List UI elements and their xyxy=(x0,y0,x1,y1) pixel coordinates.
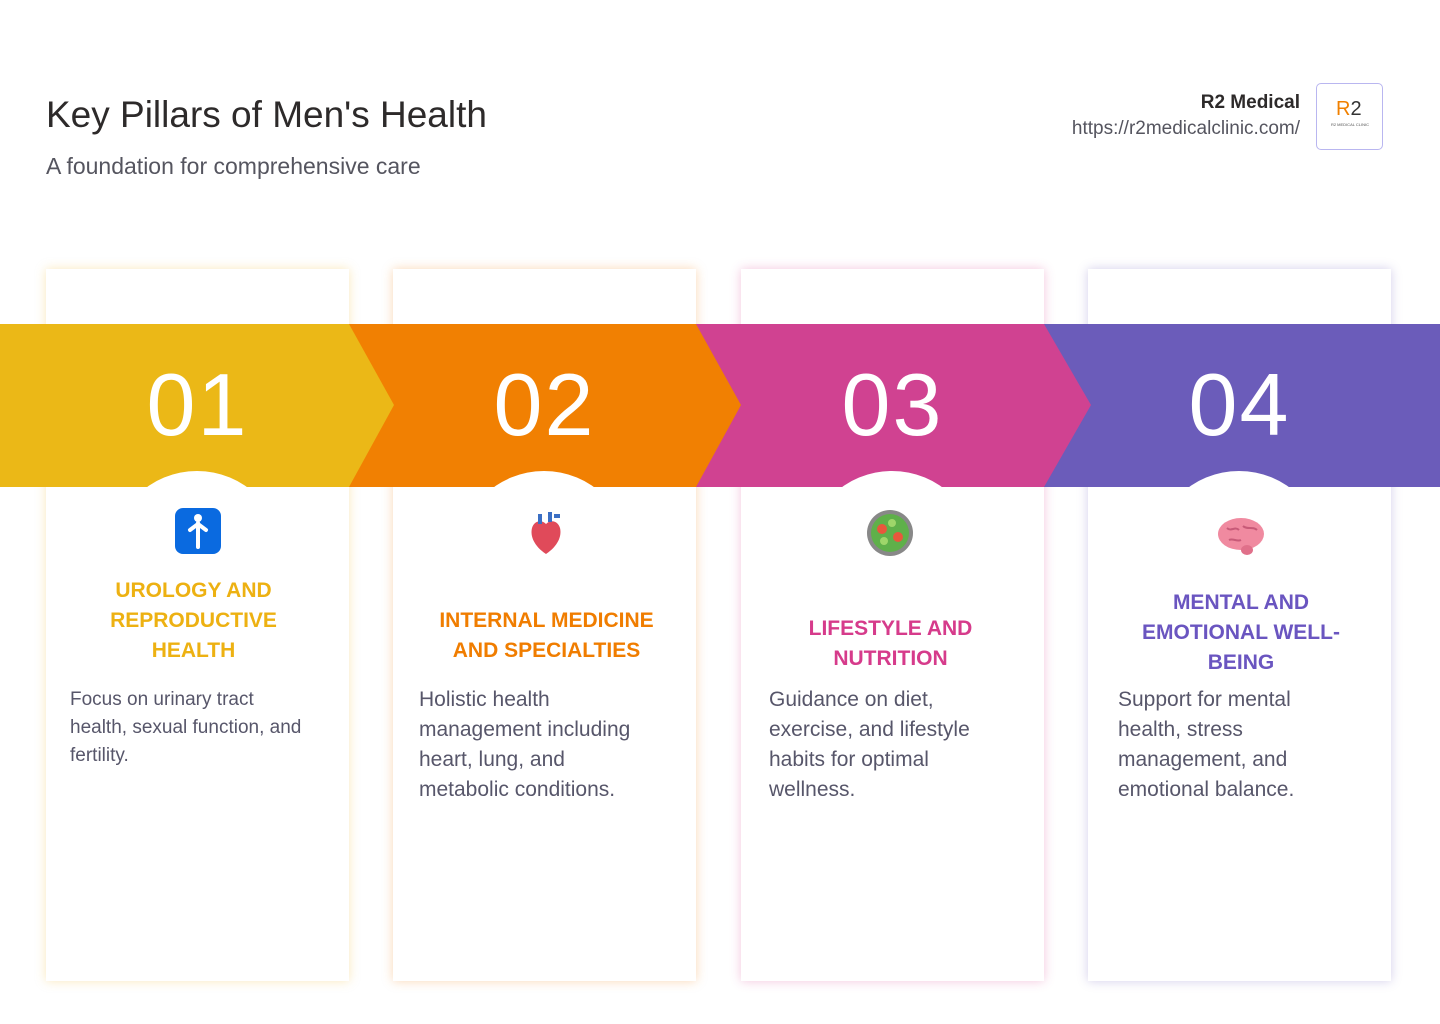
heading 2: INTERNAL MEDICINE xyxy=(439,609,654,632)
card 3 xyxy=(741,269,1044,981)
text: 03 xyxy=(842,355,943,454)
body 3: wellness. xyxy=(769,778,855,801)
heading 1: HEALTH xyxy=(152,639,235,662)
body 4: management, and xyxy=(1118,748,1287,771)
body 2: heart, lung, and xyxy=(419,748,565,771)
heading 3 xyxy=(809,617,972,670)
text: 04 xyxy=(1189,355,1290,454)
logo: R2 MEDICAL CLINIC xyxy=(1331,122,1369,127)
body 3: habits for optimal xyxy=(769,748,929,771)
heading 4: BEING xyxy=(1208,651,1274,674)
title: Key Pillars of Men's Health xyxy=(46,94,487,135)
brand block xyxy=(1072,92,1300,139)
heading 2: AND SPECIALTIES xyxy=(453,639,640,662)
card 4 xyxy=(1088,269,1391,981)
logo: R2 xyxy=(1336,98,1362,120)
heading 4 xyxy=(1142,591,1340,674)
icon: heart xyxy=(532,512,560,554)
body 1: fertility. xyxy=(70,745,129,766)
icon: person xyxy=(175,508,221,554)
body 4 xyxy=(1118,688,1294,801)
body 2: management including xyxy=(419,718,630,741)
heading 3: LIFESTYLE AND xyxy=(809,617,972,640)
subtitle: A foundation for comprehensive care xyxy=(46,153,421,179)
body 4: emotional balance. xyxy=(1118,778,1294,801)
body 1: Focus on urinary tract xyxy=(70,689,254,710)
icon: brain xyxy=(1218,518,1264,555)
body 4: health, stress xyxy=(1118,718,1243,741)
body 3 xyxy=(769,688,970,801)
icon: salad xyxy=(867,510,913,556)
logo xyxy=(1316,83,1383,150)
heading 1: REPRODUCTIVE xyxy=(110,609,277,632)
body 1 xyxy=(70,689,301,766)
heading 2 xyxy=(439,609,654,662)
heading 4: EMOTIONAL WELL- xyxy=(1142,621,1340,644)
body 2: metabolic conditions. xyxy=(419,778,615,801)
text: 02 xyxy=(494,355,595,454)
brand block: https://r2medicalclinic.com/ xyxy=(1072,118,1300,139)
numbers: 01 xyxy=(147,355,248,454)
brand block: R2 Medical xyxy=(1201,92,1300,113)
heading 3: NUTRITION xyxy=(833,647,948,670)
heading 4: MENTAL AND xyxy=(1173,591,1309,614)
heading 1 xyxy=(110,579,277,662)
card 2 xyxy=(393,269,696,981)
body 3: exercise, and lifestyle xyxy=(769,718,970,741)
body 2: Holistic health xyxy=(419,688,550,711)
body 4: Support for mental xyxy=(1118,688,1291,711)
body 1: health, sexual function, and xyxy=(70,717,301,738)
body 3: Guidance on diet, xyxy=(769,688,934,711)
heading 1: UROLOGY AND xyxy=(115,579,272,602)
body 2 xyxy=(419,688,630,801)
card 1 xyxy=(46,269,349,981)
